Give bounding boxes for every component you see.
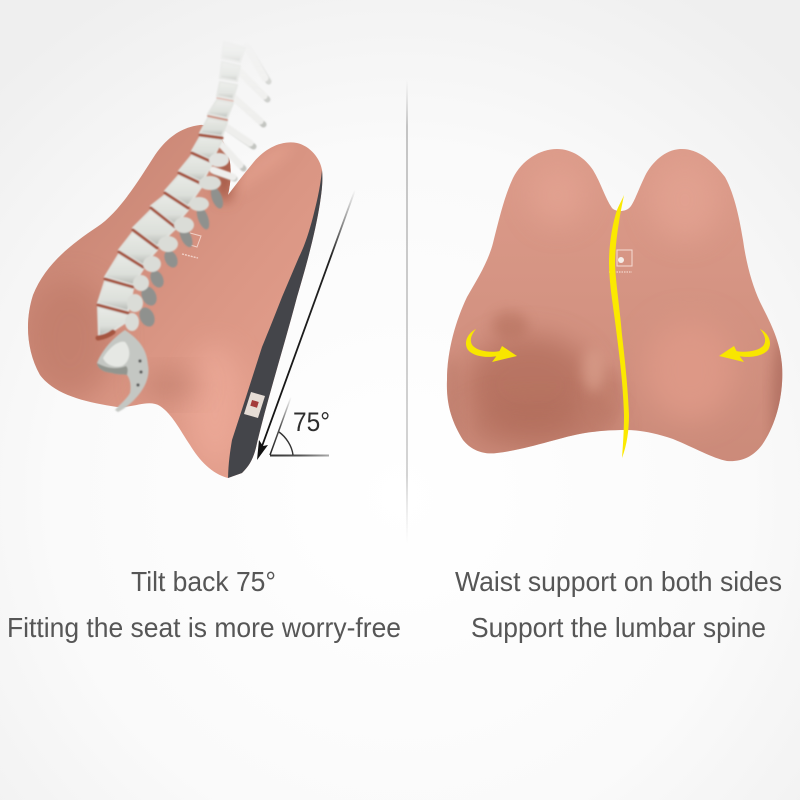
cushion body with dark back side (28, 124, 322, 478)
cushion body (440, 140, 792, 470)
panel: tilted cushion side view (20, 42, 355, 485)
panel: cushion front view (440, 140, 792, 470)
left waist arrow (466, 329, 517, 362)
upper spinous processes (213, 47, 268, 178)
caption: right: Waist support on both sides (455, 566, 782, 597)
caption: left (7, 566, 401, 643)
sacrum (97, 330, 149, 412)
lower spinous processes (136, 186, 225, 329)
yellow spine line (609, 195, 629, 458)
side label tag (244, 392, 265, 418)
vertebra bodies (98, 42, 245, 336)
right waist arrow (719, 329, 770, 362)
caption: left: Tilt back 75° (131, 566, 276, 597)
caption: right: Support the lumbar spine (471, 612, 766, 643)
spine illustration (97, 42, 268, 412)
intervertebral discs (98, 98, 233, 338)
75 degree angle marker (270, 397, 330, 456)
articular column (125, 153, 229, 331)
small logo mark (182, 233, 201, 258)
75 degree angle marker: 75° (293, 407, 330, 437)
caption: right (455, 566, 782, 643)
centre logo (609, 250, 632, 272)
caption: left: Fitting the seat is more worry-free (7, 612, 401, 643)
tilt arrow (257, 190, 355, 460)
